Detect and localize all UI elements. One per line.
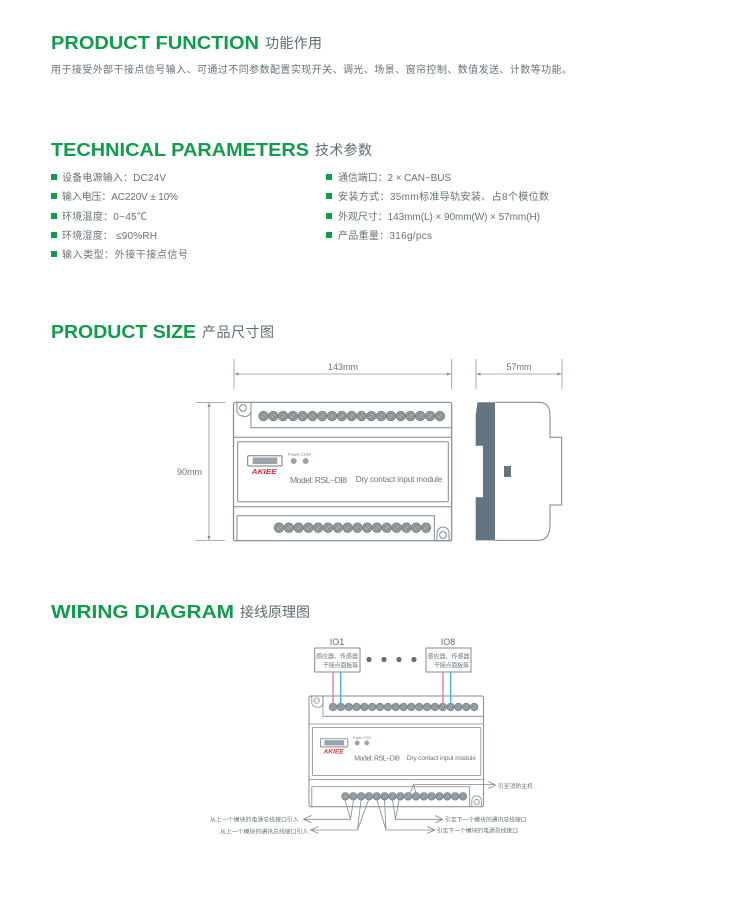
leader: power bus out: 引至下一个模块的电源总线接口 (437, 826, 518, 834)
input box: IO1 (315, 637, 360, 672)
input box: IO8 (426, 637, 471, 672)
indicator labels: Power COM (353, 736, 371, 740)
parameter list: left column: 环境温度：0~45℃ (62, 210, 147, 223)
leader: to fire host (410, 782, 533, 794)
device front view (234, 402, 452, 541)
heading: wiring diagram: WIRING DIAGRAM (51, 601, 234, 622)
parameter list: right column: 产品重量：316g/pcs (338, 229, 432, 242)
dimension: depth 57mm: 57mm (506, 362, 532, 372)
parameter list: right column: 外观尺寸：143mm(L) × 90mm(W) × 57mm(H) (338, 210, 540, 223)
heading: technical parameters: TECHNICAL PARAMETERS (51, 139, 309, 160)
heading: product size: PRODUCT SIZE (51, 321, 196, 342)
dimension: height 90mm (177, 402, 225, 540)
brand logo: AKIEE (322, 749, 345, 755)
dimension: depth 57mm (476, 359, 562, 389)
input wires (333, 672, 451, 705)
heading: product size: 产品尺寸图 (202, 324, 274, 340)
input box: IO1: IO1 (330, 637, 344, 647)
leader: comm bus out: 引至下一个模块的通讯总线接口 (445, 816, 527, 824)
parameter list: left column: 输入类型：外接干接点信号 (62, 248, 188, 261)
wiring module (309, 696, 484, 807)
input box: IO1: 干接点面板等 (323, 662, 358, 670)
device side view (476, 402, 562, 540)
leader: power bus out (377, 800, 518, 834)
mounting hole: top (312, 696, 323, 707)
brand logo: AKIEE (251, 467, 278, 476)
display window (320, 739, 348, 747)
heading: wiring diagram (51, 601, 310, 622)
indicator LEDs (355, 741, 369, 745)
input box: IO8: IO8 (441, 637, 455, 647)
parameter list: right column: 通信端口：2 × CAN−BUS (338, 171, 451, 184)
heading: wiring diagram: 接线原理图 (240, 604, 310, 620)
dimension: height 90mm: 90mm (177, 467, 202, 477)
terminal row: top (329, 703, 478, 711)
leader: power bus in (210, 800, 354, 824)
heading: technical parameters: 技术参数 (315, 142, 372, 158)
parameter list: left column: 输入电压：AC220V ± 10% (62, 190, 178, 203)
terminal row: bottom (274, 523, 431, 532)
input box: IO1: 感应器、传感器 (316, 652, 358, 660)
leader: comm bus in (220, 800, 368, 836)
leader: comm bus in: 从上一个模块的通讯总线接口引入 (220, 828, 308, 836)
input box: IO8: 干接点面板等 (434, 662, 469, 670)
heading: product size (51, 321, 274, 342)
model label: Model: RSL−DI8 (354, 756, 400, 763)
indicator labels: Power COM (288, 452, 311, 457)
display window (248, 456, 282, 466)
parameter list: left column: 环境湿度： ≤90%RH (62, 229, 157, 242)
module description: Dry contact input module (407, 755, 476, 762)
parameter list: left column (51, 171, 188, 261)
mounting hole: bottom (472, 796, 481, 807)
dimension: width 143mm (234, 359, 452, 389)
leader: comm bus out (392, 800, 527, 824)
model label: Model: RSL−DI8 (290, 475, 347, 485)
heading: product function: 功能作用 (265, 35, 322, 51)
mounting hole: bottom (437, 527, 449, 540)
terminal row: top (259, 411, 445, 421)
text block: function description: 用于接受外部干接点信号输入、可通过不同参数配置实现开关、调光、场景、窗帘控制、数值发送、计数等功能。 (51, 63, 572, 76)
heading: product function: PRODUCT FUNCTION (51, 32, 259, 53)
input box: IO8: 感应器、传感器 (428, 652, 470, 660)
indicator LEDs (291, 458, 309, 464)
front panel (312, 728, 481, 776)
leader: to fire host: 引至消防主机 (498, 782, 533, 790)
dimension: width 143mm: 143mm (328, 362, 358, 372)
front panel (238, 442, 448, 502)
parameter list: right column: 安装方式：35mm标准导轨安装、占8个模位数 (338, 190, 549, 203)
module description: Dry contact input module (356, 475, 443, 484)
leader: power bus in: 从上一个模块的电源总线接口引入 (210, 816, 299, 824)
parameter list: right column (326, 171, 549, 242)
mounting hole: top (237, 402, 251, 416)
terminal row: bottom (342, 793, 467, 800)
parameter list: left column: 设备电源输入：DC24V (62, 171, 166, 184)
dots between inputs (366, 657, 417, 662)
